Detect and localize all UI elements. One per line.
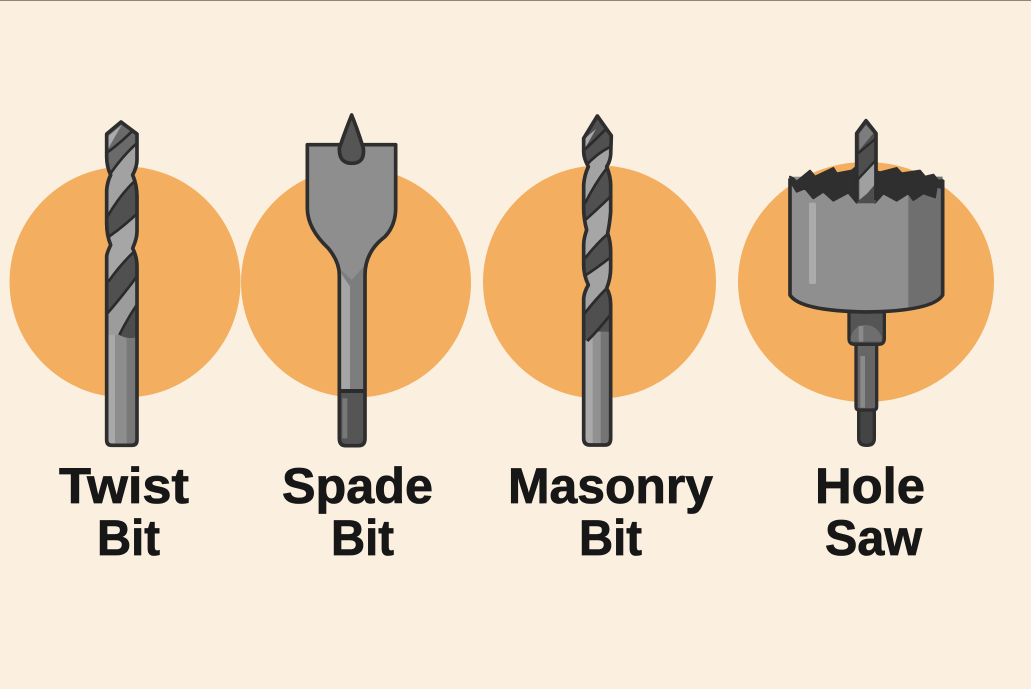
label: Masonry Bit: Bit (579, 510, 642, 566)
label: Twist Bit: Bit (97, 510, 160, 566)
label: Twist Bit: Twist (59, 458, 189, 514)
label: Spade Bit: Bit (331, 510, 394, 566)
small shank tip (859, 408, 874, 445)
orange circle: twist bit (10, 166, 240, 398)
label: Twist Bit (59, 458, 189, 566)
pilot drill (856, 124, 876, 204)
label: Hole Saw (815, 458, 925, 566)
top edge line (0, 0, 1031, 1)
icon: spade drill bit (303, 115, 400, 448)
teeth (790, 165, 943, 203)
icon: twist drill bit (103, 118, 140, 450)
icon: hole saw (787, 118, 947, 445)
label: Masonry Bit (508, 458, 713, 566)
panel: masonry bit (483, 113, 716, 566)
panel: twist bit (10, 118, 240, 566)
label: Spade Bit (282, 458, 433, 566)
cup body (792, 176, 943, 310)
orange circle: masonry bit (483, 166, 716, 398)
panel: spade bit (241, 115, 471, 566)
orange circle: spade bit (241, 168, 471, 398)
orange circle: hole saw (738, 162, 994, 402)
shaft (856, 342, 877, 410)
label: Hole Saw: Hole (815, 458, 925, 514)
label: Hole Saw: Saw (825, 510, 922, 566)
panel: hole saw (738, 118, 994, 566)
collar (849, 312, 884, 344)
label: Spade Bit: Spade (282, 458, 433, 514)
label: Masonry Bit: Masonry (508, 458, 713, 514)
icon: masonry drill bit (580, 113, 615, 447)
